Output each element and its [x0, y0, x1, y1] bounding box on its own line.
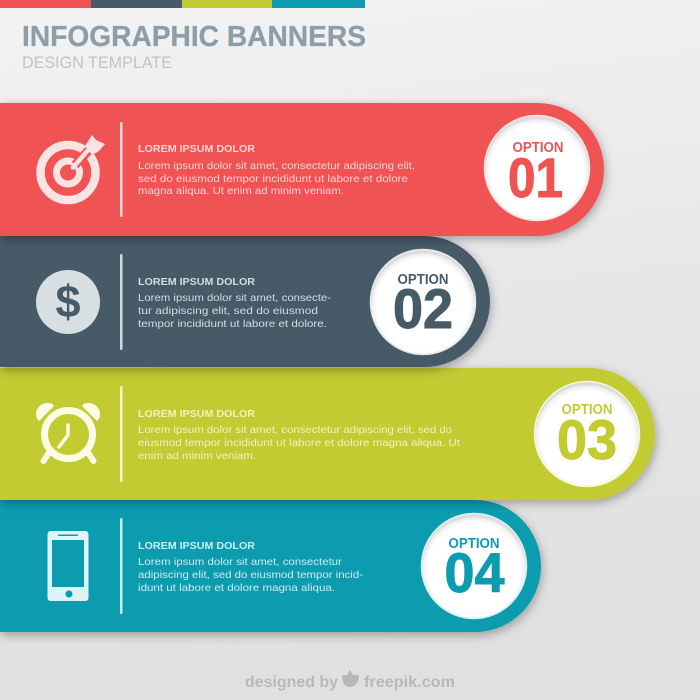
body text 03 [138, 424, 460, 462]
heading 04: LOREM IPSUM DOLOR [138, 540, 255, 552]
body text 01: sed do eiusmod tempor incididunt ut labore et dolore [138, 173, 408, 185]
icon: alarm clock [36, 403, 100, 461]
badge 04: 04 [444, 541, 504, 604]
body text 02: tempor incididunt ut labore et dolore. [138, 318, 327, 330]
body text 04: adipiscing elit, sed do eiusmod tempor incid- [138, 569, 364, 581]
body text 04: idunt ut labore et dolore magna aliqua. [138, 582, 335, 594]
icon: smartphone [48, 531, 88, 601]
footer credit: designed by [245, 674, 338, 691]
title: INFOGRAPHIC BANNERS [22, 21, 366, 53]
heading 03: LOREM IPSUM DOLOR [138, 408, 255, 420]
badge 04 [422, 514, 526, 618]
body text 02: Lorem ipsum dolor sit amet, consecte- [138, 292, 332, 304]
body text 01: magna aliqua. Ut enim ad minim veniam. [138, 185, 344, 197]
icon: dollar coin [36, 270, 100, 334]
body text 03: Lorem ipsum dolor sit amet, consectetur adipiscing elit, sed do [138, 424, 452, 436]
footer credit [245, 670, 455, 691]
badge 03 [534, 382, 640, 486]
badge 02: 02 [393, 277, 453, 340]
panel: option 03 [0, 368, 655, 500]
panel: option 04 [0, 500, 541, 632]
badge 03: OPTION [562, 402, 612, 418]
badge 01: OPTION [512, 140, 564, 156]
footer credit: freepik.com [364, 674, 455, 691]
body text 02: tur adipiscing elit, sed do eiusmod [138, 305, 318, 317]
heading 02: LOREM IPSUM DOLOR [138, 276, 255, 288]
badge 02 [370, 250, 476, 354]
icon: dollar coin: $ [55, 276, 81, 327]
badge 04: OPTION [448, 536, 500, 552]
top colour strip [0, 0, 365, 8]
body text 03: eiusmod tempor incididunt ut labore et dolore magna aliqua. Ut [138, 437, 460, 449]
body text 01: Lorem ipsum dolor sit amet, consectetur adipiscing elit, [138, 160, 415, 172]
body text 03: enim ad minim veniam. [138, 450, 256, 462]
body text 04 [138, 556, 364, 594]
body text 02 [138, 292, 332, 330]
badge 03: 03 [557, 408, 617, 471]
badge 01: 01 [508, 146, 563, 209]
body text 01 [138, 160, 415, 197]
panel: option 02 [0, 236, 490, 367]
badge 01 [484, 116, 590, 220]
subtitle: DESIGN TEMPLATE [22, 53, 172, 72]
icon: freepik logo [342, 670, 359, 687]
badge 02: OPTION [398, 272, 448, 288]
heading 01: LOREM IPSUM DOLOR [138, 143, 255, 155]
body text 04: Lorem ipsum dolor sit amet, consectetur [138, 556, 343, 568]
panel: option 01 [0, 103, 604, 236]
icon: target with arrow [40, 135, 105, 200]
